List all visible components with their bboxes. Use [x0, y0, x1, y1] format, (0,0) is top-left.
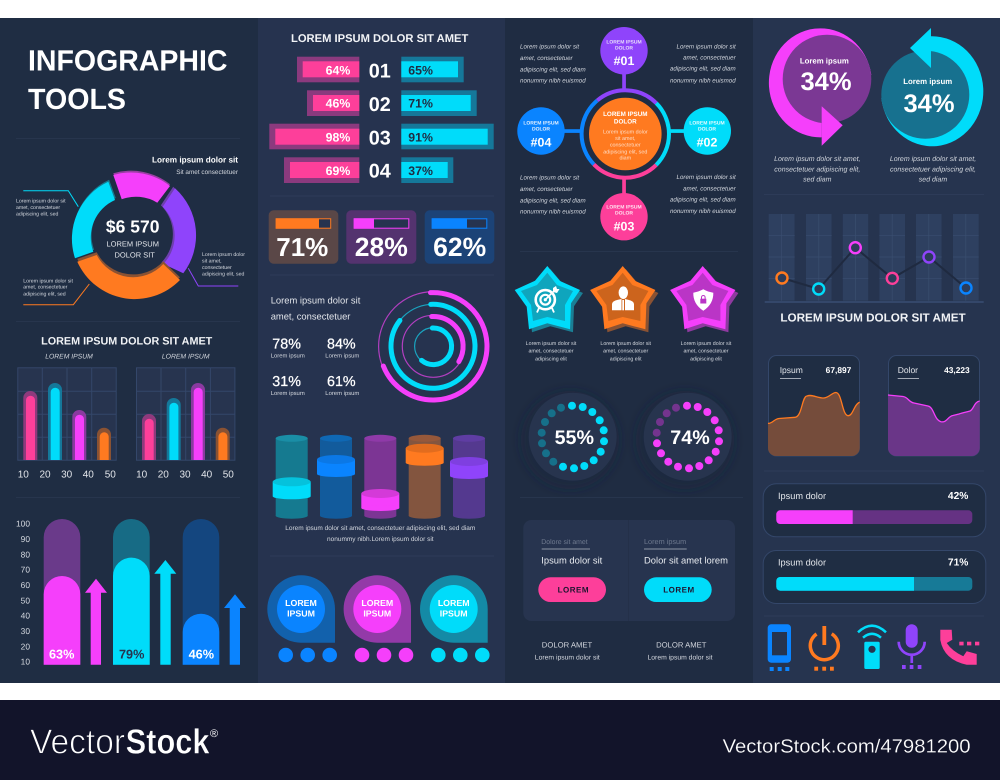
- donut chart: $6 570: [106, 217, 160, 237]
- area chart card: ipsum: 67,897: [826, 365, 852, 375]
- text block: star 2 caption: adipiscing elit: [610, 357, 642, 363]
- hub diagram: LOREM IPSUM: [603, 111, 648, 118]
- panel: buttons: [523, 520, 735, 621]
- icon: remote wifi: [858, 626, 886, 669]
- text block: star 2 caption: [600, 341, 652, 363]
- text block: hub bottom right: amet, consectetuer: [683, 185, 737, 192]
- text block: cylinder caption: nonummy nibh.Lorem ipsum dolor sit: [327, 536, 434, 543]
- text block: dolor amet right: Lorem ipsum dolor sit: [648, 655, 713, 662]
- stat card: blue 62%: [425, 210, 494, 264]
- cylinder: cyan: [273, 435, 311, 519]
- area chart card: ipsum: [768, 356, 860, 456]
- bar chart: right: 10: [136, 469, 148, 480]
- donut heading label: Sit amet consectetuer: [176, 169, 239, 176]
- arrow: cyan: [154, 560, 176, 665]
- callout: orange segment: adipiscing elit, sed: [23, 291, 66, 297]
- circular arrow: cyan 34%: [881, 28, 983, 146]
- text block: star 1 caption: adipiscing elit: [535, 357, 567, 363]
- bar chart: right: 40: [201, 469, 213, 480]
- left button group: LOREM: [558, 586, 589, 595]
- text block: right arrow caption: consectetuer adipiscing elit,: [890, 165, 976, 173]
- node #04: DOLOR: [532, 127, 550, 133]
- title: TOOLS: [28, 83, 126, 116]
- arrow: magenta: [85, 579, 107, 665]
- node #03: [600, 193, 648, 240]
- text block: dolor amet right: [648, 641, 713, 662]
- area chart card: ipsum: Ipsum: [780, 365, 803, 375]
- node #01: [600, 27, 648, 74]
- text block: ring chart stats: 84%: [327, 336, 356, 352]
- axis: percentage scale: [16, 519, 30, 667]
- axis: percentage scale: 30: [21, 626, 30, 636]
- text block: left arrow caption: consectetuer adipiscing elit,: [774, 165, 860, 173]
- area chart card: dolor: Dolor: [898, 365, 918, 375]
- comparison bars: row 01: 65%: [408, 63, 433, 77]
- text block: hub bottom right: nonummy nibh euismod: [670, 208, 736, 215]
- text block: star 2 caption: amet, consectetuer: [603, 349, 648, 355]
- axis: percentage scale: 60: [21, 580, 30, 590]
- pin: cyan: IPSUM: [440, 609, 468, 619]
- bar chart: left: [18, 353, 116, 480]
- comparison bars: row 01: 64%: [326, 63, 350, 77]
- left button group: Dolore sit amet: [541, 539, 588, 546]
- hub diagram: sit amet,: [615, 136, 636, 142]
- text block: hub top left: amet, consectetuer: [520, 55, 574, 62]
- text block: dolor amet left: [535, 641, 600, 662]
- heading: bar charts: LOREM IPSUM DOLOR SIT AMET: [41, 336, 213, 348]
- axis: percentage scale: 70: [21, 565, 30, 575]
- text block: star 2 caption: Lorem ipsum dolor sit: [600, 341, 652, 347]
- text block: ring chart stats: [271, 294, 361, 397]
- text block: ring chart stats: 61%: [327, 374, 356, 390]
- hub diagram: DOLOR: [614, 118, 637, 125]
- cylinder: magenta: [361, 435, 399, 519]
- comparison bars: row 01: 01: [369, 60, 391, 82]
- callout: cyan segment: amet, consectetuer: [16, 205, 60, 211]
- comparison bars: row 04: 37%: [408, 164, 433, 178]
- stat card: blue 62%: 62%: [433, 232, 486, 262]
- icon: power button: [805, 626, 844, 671]
- comparison bars: row 03: 91%: [408, 130, 433, 144]
- text block: star 3 caption: Lorem ipsum dolor sit: [681, 341, 732, 347]
- text block: hub top left: adipiscing elit, sed diam: [520, 66, 586, 73]
- watermark band: [0, 700, 1000, 780]
- text block: hub top right: amet, consectetuer: [683, 55, 737, 62]
- stat card: orange 71%: [269, 210, 338, 264]
- heading: column 2: LOREM IPSUM DOLOR SIT AMET: [291, 33, 469, 45]
- cylinder: blue: [317, 435, 355, 519]
- hub diagram: adipiscing elit, sed: [603, 149, 647, 155]
- hub diagram: diam: [619, 156, 632, 162]
- text block: star 3 caption: amet, consectetuer: [683, 349, 729, 355]
- comparison bars: row 02: 71%: [408, 97, 433, 111]
- comparison bars: row 03: 98%: [326, 130, 350, 144]
- right button group: [644, 537, 728, 602]
- node #02: [684, 107, 731, 155]
- watermark url: VectorStock.com/47981200: [723, 737, 971, 758]
- panel: column 2 background: [258, 18, 505, 683]
- node #04: [517, 107, 565, 155]
- logo: VectorStock: [30, 722, 218, 761]
- axis: percentage scale: 40: [21, 611, 30, 621]
- node #01: DOLOR: [615, 45, 633, 51]
- node #03: DOLOR: [615, 211, 633, 217]
- comparison bars: row 04: [284, 157, 453, 183]
- text block: hub bottom right: [670, 174, 737, 215]
- dial: 74%: [636, 391, 734, 489]
- text block: left arrow caption: Lorem ipsum dolor sit amet,: [774, 155, 861, 163]
- text block: ring chart stats: Lorem ipsum: [271, 352, 305, 359]
- text block: hub top left: Lorem ipsum dolor sit: [520, 43, 579, 50]
- text block: dolor amet left: Lorem ipsum dolor sit: [535, 655, 600, 662]
- panel: column 1 background: [0, 18, 258, 683]
- donut chart: LOREM IPSUM: [106, 240, 159, 249]
- callout: orange segment: [23, 278, 89, 305]
- icon: star shield: [670, 266, 738, 332]
- text block: star 1 caption: [526, 341, 577, 363]
- title: [28, 45, 228, 116]
- text block: ring chart stats: Lorem ipsum: [271, 390, 305, 397]
- logo: VectorStock: Vector: [30, 722, 125, 761]
- dial: 55%: [521, 391, 619, 489]
- panel: column 4 background: [753, 18, 1000, 683]
- text block: cylinder caption: [285, 525, 475, 543]
- text block: hub top left: nonummy nibh euismod: [520, 78, 586, 85]
- bar: cyan 79%: [113, 519, 150, 665]
- hub diagram: [563, 72, 687, 196]
- progress card: 42%: 42%: [948, 491, 968, 502]
- axis: percentage scale: 80: [21, 549, 30, 559]
- arrow: blue: [224, 594, 246, 665]
- left button group: [538, 539, 606, 602]
- pin: magenta: LOREM: [361, 598, 393, 608]
- text block: dolor amet left: DOLOR AMET: [542, 641, 593, 650]
- bar chart: left: 20: [39, 469, 51, 480]
- callout: purple segment: sit amet,: [202, 258, 222, 264]
- circular arrow: cyan 34%: Lorem ipsum: [903, 77, 952, 86]
- node #02: #02: [697, 136, 717, 150]
- text block: cylinder caption: Lorem ipsum dolor sit amet, consectetuer adipiscing elit, sed diam: [285, 525, 475, 532]
- node #01: #01: [614, 54, 634, 68]
- stat card: magenta 28%: 28%: [355, 232, 408, 262]
- callout: orange segment: amet, consectetuer: [23, 285, 68, 291]
- bar chart: left: LOREM IPSUM: [45, 353, 93, 360]
- stat card: orange 71%: 71%: [276, 232, 328, 262]
- circular arrow: cyan 34%: 34%: [903, 90, 955, 118]
- callout: purple segment: consectetuer: [202, 265, 232, 271]
- node #04: #04: [531, 136, 551, 150]
- axis: percentage scale: 90: [21, 534, 30, 544]
- bar chart: right: LOREM IPSUM: [162, 353, 210, 360]
- callout: cyan segment: adipiscing elit, sed: [16, 211, 59, 217]
- right button group: LOREM: [663, 586, 695, 595]
- area chart card: dolor: [888, 356, 980, 456]
- text block: hub top right: Lorem ipsum dolor sit: [677, 43, 736, 50]
- text block: ring chart stats: Lorem ipsum: [325, 390, 359, 397]
- callout: purple segment: adipiscing elit, sed: [202, 272, 245, 278]
- pin: cyan: LOREM: [438, 598, 470, 608]
- comparison bars: row 04: 69%: [326, 164, 350, 178]
- axis: percentage scale: 20: [21, 641, 30, 651]
- text block: right arrow caption: Lorem ipsum dolor sit amet,: [890, 155, 976, 163]
- axis: percentage scale: 10: [21, 657, 30, 667]
- circular arrow: magenta 34%: [769, 28, 871, 146]
- text block: hub bottom right: Lorem ipsum dolor sit: [677, 174, 736, 181]
- text block: hub bottom left: nonummy nibh euismod: [520, 209, 586, 216]
- comparison bars: row 04: 04: [369, 161, 391, 183]
- text block: hub top left: [520, 43, 586, 85]
- progress card: 71%: Ipsum dolor: [778, 558, 826, 568]
- text block: star 3 caption: adipiscing elit: [690, 357, 722, 363]
- callout: cyan segment: [16, 191, 78, 217]
- right button group: Dolor sit amet lorem: [644, 555, 728, 566]
- circular arrow: magenta 34%: Lorem ipsum: [800, 57, 849, 66]
- text block: ring chart stats: 31%: [272, 374, 301, 390]
- text block: hub bottom left: Lorem ipsum dolor sit: [520, 175, 579, 182]
- text block: left arrow caption: sed diam: [803, 176, 832, 184]
- comparison bars: row 03: 03: [369, 128, 391, 150]
- bar: blue 46%: [183, 519, 219, 665]
- progress card: 71%: 71%: [948, 558, 968, 569]
- comparison bars: row 02: [307, 90, 477, 116]
- axis: percentage scale: 100: [16, 519, 30, 529]
- comparison bars: row 01: [297, 57, 464, 82]
- text block: hub top right: nonummy nibh euismod: [670, 77, 736, 84]
- left button group: Ipsum dolor sit: [541, 555, 603, 566]
- comparison bars: row 03: [269, 124, 494, 150]
- bar: magenta 63%: 63%: [49, 647, 74, 661]
- text block: left arrow caption: [774, 155, 861, 184]
- callout: purple segment: Lorem ipsum dolor: [202, 252, 245, 258]
- text block: right arrow caption: [890, 155, 976, 184]
- pin: cyan: [420, 575, 490, 662]
- text block: star 3 caption: [681, 341, 732, 363]
- bar chart: right: [136, 353, 235, 480]
- donut chart: [72, 171, 196, 299]
- hub diagram: Lorem ipsum dolor: [603, 130, 648, 136]
- node #02: LOREM IPSUM: [689, 121, 725, 127]
- pin: blue: IPSUM: [287, 609, 315, 619]
- hub diagram: consectetuer: [610, 143, 641, 149]
- node #03: LOREM IPSUM: [606, 205, 642, 211]
- icon: phone call: [940, 630, 979, 665]
- area chart card: dolor: 43,223: [944, 365, 970, 375]
- text block: ring chart stats: 78%: [272, 336, 301, 352]
- text block: hub bottom left: adipiscing elit, sed diam: [520, 197, 586, 204]
- dial: 74%: 74%: [670, 427, 710, 449]
- text block: hub bottom left: [520, 175, 586, 216]
- callout: cyan segment: Lorem ipsum dolor sit: [16, 199, 66, 205]
- dial: 55%: 55%: [555, 427, 594, 449]
- text block: right arrow caption: sed diam: [919, 176, 947, 184]
- pin: magenta: [344, 575, 413, 662]
- node #03: #03: [614, 220, 634, 234]
- circular arrow: magenta 34%: 34%: [800, 68, 852, 96]
- stat card: magenta 28%: [346, 210, 416, 264]
- progress card: 42%: Ipsum dolor: [778, 491, 826, 501]
- logo: VectorStock: ®: [210, 728, 218, 740]
- bar: cyan 79%: 79%: [119, 647, 144, 661]
- heading: line chart: LOREM IPSUM DOLOR SIT AMET: [780, 311, 966, 324]
- pin: magenta: IPSUM: [363, 609, 391, 619]
- bar: magenta 63%: [44, 519, 80, 665]
- icon: star target: [515, 266, 583, 332]
- node #04: LOREM IPSUM: [523, 121, 559, 127]
- donut heading label: [152, 156, 239, 176]
- comparison bars: row 02: 46%: [326, 97, 350, 111]
- bar chart: right: 30: [179, 469, 191, 480]
- bar chart: left: 30: [61, 469, 73, 480]
- node #01: LOREM IPSUM: [606, 39, 642, 45]
- panel: column 3 background: [505, 18, 753, 683]
- bar chart: left: 50: [105, 469, 116, 480]
- cylinder: orange: [406, 435, 444, 519]
- cylinder: purple: [450, 435, 488, 519]
- donut heading label: Lorem ipsum dolor sit: [152, 156, 238, 165]
- text block: hub top right: [670, 43, 737, 84]
- text block: hub top right: adipiscing elit, sed diam: [670, 66, 736, 73]
- bar: blue 46%: 46%: [189, 647, 214, 661]
- text block: hub bottom left: amet, consectetuer: [520, 186, 574, 193]
- logo: VectorStock: Stock: [126, 722, 210, 761]
- comparison bars: row 02: 02: [369, 94, 391, 116]
- right button group: Lorem ipsum: [644, 537, 686, 546]
- callout: purple segment: [188, 252, 245, 286]
- text block: ring chart stats: Lorem ipsum dolor sit: [271, 294, 361, 305]
- title: INFOGRAPHIC: [28, 45, 228, 78]
- text block: ring chart stats: Lorem ipsum: [325, 352, 359, 359]
- text block: star 1 caption: Lorem ipsum dolor sit: [526, 341, 577, 347]
- text block: star 1 caption: amet, consectetuer: [528, 349, 574, 355]
- bar chart: left: 40: [83, 469, 94, 480]
- text block: hub bottom right: adipiscing elit, sed diam: [670, 197, 736, 204]
- bar chart: left: 10: [18, 469, 29, 480]
- progress card: 42%: [763, 484, 986, 537]
- text block: ring chart stats: amet, consectetuer: [271, 310, 350, 321]
- line chart over columns: [765, 214, 984, 303]
- icon: mobile phone: [768, 624, 791, 671]
- bar chart: right: 20: [158, 469, 169, 480]
- axis: percentage scale: 50: [21, 595, 30, 605]
- radial ring chart: [377, 290, 490, 403]
- node #02: DOLOR: [698, 127, 716, 133]
- pin: blue: [267, 575, 337, 662]
- bar chart: right: 50: [223, 469, 234, 480]
- progress card: 71%: [763, 550, 986, 604]
- icon: microphone: [899, 624, 925, 669]
- icon: star person: [590, 266, 658, 332]
- callout: orange segment: Lorem ipsum dolor sit: [23, 278, 73, 284]
- donut chart: DOLOR SIT: [114, 250, 155, 259]
- text block: dolor amet right: DOLOR AMET: [656, 641, 707, 650]
- pin: blue: LOREM: [285, 598, 317, 608]
